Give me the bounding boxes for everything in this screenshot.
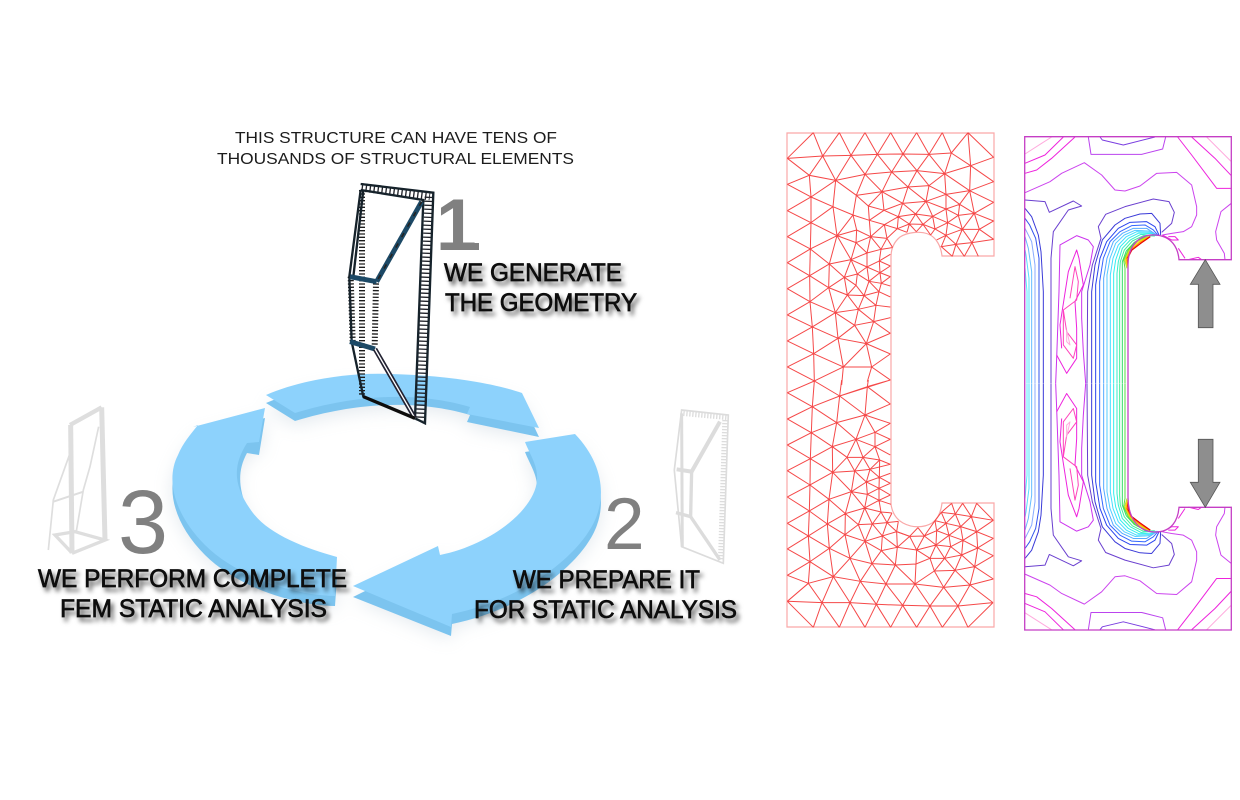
arrow: downward load [1190,439,1220,507]
structure frame 1: dark wireframe [349,184,433,423]
step 1 label [444,259,637,317]
step 3 label: WE PERFORM COMPLETE [38,565,347,593]
mesh: upper half [787,133,994,385]
step 3 label: FEM STATIC ANALYSIS [60,595,327,623]
structure frame 2: ghost wireframe [674,410,728,563]
title: structure note: THOUSANDS OF STRUCTURAL ELEMENTS [217,151,574,168]
structure frame 3: ghost wireframe [48,407,105,553]
title: structure note [217,130,574,168]
panel: finite element mesh [787,133,994,627]
mesh: lower half [787,380,993,627]
step 2 label [474,566,737,624]
arrow: step 2 to step 3 [353,434,601,636]
step 1 number: 1 [436,185,477,266]
step 1 label: THE GEOMETRY [445,289,637,317]
step 2 number: 2 [604,484,645,565]
panel: stress contour plot [1025,137,1231,630]
title: structure note: THIS STRUCTURE CAN HAVE TENS OF [235,130,557,147]
step 3 number: 3 [118,473,168,573]
left wall contours [1025,200,1082,383]
step 1 label: WE GENERATE [444,259,622,287]
part outline [1025,137,1231,630]
step 3 label [38,565,347,623]
cycle diagram: three blue arrows [172,374,601,639]
wall contours around fillet [1087,199,1174,383]
arrow: step 3 to step 1 [172,408,337,606]
arrow: upward load [1190,260,1220,328]
contours: lower half (mirrored) [1025,383,1231,630]
arrow: step 1 to step 2 [266,374,539,437]
step 2 label: WE PREPARE IT [513,566,700,594]
central pink contours [1056,236,1093,383]
step 2 label: FOR STATIC ANALYSIS [474,596,737,624]
contours: upper half [1025,137,1231,383]
